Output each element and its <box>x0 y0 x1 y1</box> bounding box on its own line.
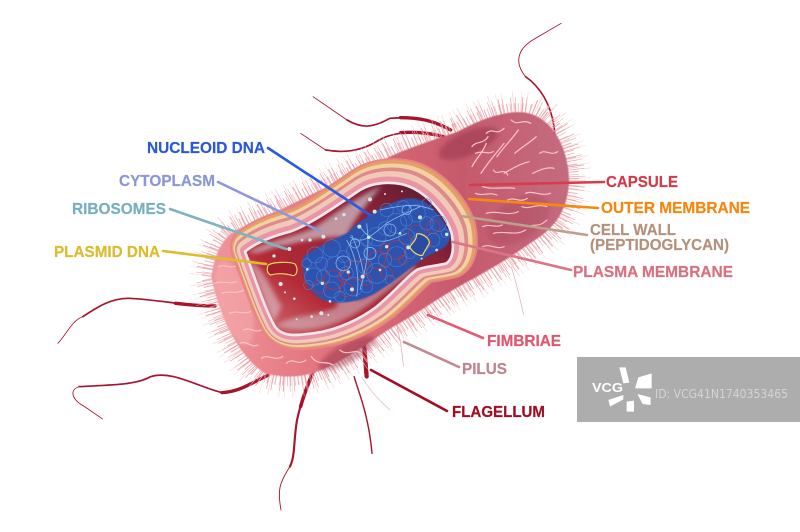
leader: plasma membrane <box>453 242 571 270</box>
leader: ribosomes <box>170 209 286 249</box>
watermark logo petals <box>608 367 652 412</box>
cell envelope layers and cut-away cytoplasm <box>245 178 458 335</box>
label: flagellum: FLAGELLUM <box>452 404 545 421</box>
cytoplasm cavity <box>245 183 453 335</box>
leader lines <box>163 148 604 411</box>
fimbriae and pili fringe <box>211 112 569 410</box>
label: ribosomes: RIBOSOMES <box>72 201 166 218</box>
bacterium illustration <box>58 23 569 510</box>
watermark panel <box>577 357 800 422</box>
label: cell wall: CELL WALL <box>590 222 676 239</box>
envelope: periplasm <box>248 180 456 332</box>
leader: plasmid DNA <box>163 251 266 264</box>
surface fimbriae squiggles <box>215 120 558 365</box>
flagella <box>58 23 561 510</box>
envelope: inner wall band <box>247 181 455 333</box>
label: capsule: CAPSULE <box>606 174 678 191</box>
envelope: cell wall <box>249 179 457 331</box>
capsule body <box>207 112 569 377</box>
leader: capsule <box>470 182 604 185</box>
plasmid DNA rings <box>267 234 429 276</box>
label: plasma membrane: PLASMA MEMBRANE <box>573 264 733 281</box>
leader: flagellum <box>371 370 447 411</box>
watermark ID: ID: VCG41N1740353465 <box>655 387 788 401</box>
envelope: outer membrane <box>250 178 458 330</box>
nucleoid DNA tangle <box>302 198 450 303</box>
label: outer membrane: OUTER MEMBRANE <box>601 200 750 217</box>
label: plasmid DNA: PLASMID DNA <box>54 244 160 261</box>
leader: fimbriae <box>428 315 483 338</box>
label: peptidoglycan: (PEPTIDOGLYCAN) <box>590 237 729 254</box>
label: nucleoid DNA: NUCLEOID DNA <box>147 140 265 157</box>
label: pilus: PILUS <box>462 361 507 378</box>
label: fimbriae: FIMBRIAE <box>487 333 561 350</box>
leader: cytoplasm <box>218 182 320 231</box>
envelope: plasma membrane <box>246 182 454 334</box>
envelope: capsule rim <box>250 178 458 330</box>
leader: nucleoid DNA <box>268 148 370 215</box>
cytoplasm highlights <box>248 186 415 330</box>
leader: pilus <box>404 342 459 367</box>
leader: outer membrane <box>469 199 598 208</box>
leader: cell wall <box>461 216 587 235</box>
ribosome particles <box>272 190 448 320</box>
watermark logo text: VCG <box>592 380 623 395</box>
label: cytoplasm: CYTOPLASM <box>119 173 215 190</box>
